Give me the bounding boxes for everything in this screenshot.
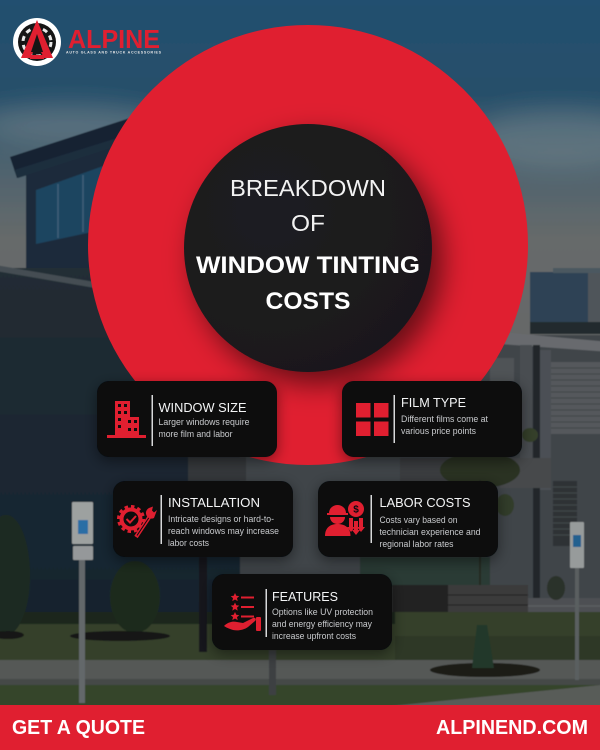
body — [380, 515, 480, 549]
body: Larger windows require — [158, 417, 250, 427]
card: film type — [342, 381, 522, 457]
upper block — [26, 140, 135, 275]
icon: worker with coin: $ — [353, 504, 359, 516]
title — [196, 175, 420, 315]
title: WINDOW TINTING — [196, 252, 420, 279]
body: various price points — [401, 426, 476, 436]
parking signs — [72, 502, 93, 544]
heading: FILM TYPE — [401, 395, 466, 410]
right building — [240, 335, 600, 645]
body: increase upfront costs — [272, 631, 356, 641]
body: labor costs — [168, 538, 209, 548]
call to action: GET A QUOTE — [12, 717, 145, 739]
shrubs — [110, 561, 160, 633]
footer bar — [0, 705, 600, 750]
body: Costs vary based on — [380, 515, 458, 525]
posts — [199, 557, 207, 652]
icon: worker with coin — [325, 501, 365, 536]
body: Intricate designs or hard-to- — [168, 514, 274, 524]
card: features — [212, 574, 392, 650]
logo wordmark: ALPINE — [68, 24, 160, 54]
logo — [13, 18, 162, 66]
body — [158, 417, 250, 439]
title disc — [184, 124, 432, 372]
low wall — [0, 268, 240, 613]
body: and energy efficiency may — [272, 619, 372, 629]
body: Different films come at — [401, 414, 488, 424]
body: technician experience and — [380, 527, 480, 537]
title: BREAKDOWN — [230, 175, 386, 201]
heading: WINDOW SIZE — [158, 400, 247, 415]
body: Options like UV protection — [272, 607, 373, 617]
title: COSTS — [266, 288, 350, 315]
body — [168, 514, 279, 548]
body: more film and labor — [158, 429, 232, 439]
glass entry — [360, 557, 490, 587]
card: labor costs — [318, 481, 498, 557]
logo badge — [13, 18, 61, 66]
red circle — [88, 25, 528, 465]
body: regional labor rates — [380, 539, 454, 549]
body — [272, 607, 373, 641]
tree — [440, 452, 520, 488]
body: reach windows may increase — [168, 526, 279, 536]
heading: FEATURES — [272, 589, 338, 604]
icon: rated list on hand — [224, 593, 261, 631]
card: window size — [97, 381, 277, 457]
icon: gear and wrench — [118, 506, 157, 537]
logo tagline: AUTO GLASS AND TRUCK ACCESSORIES — [66, 50, 162, 54]
stone wall — [392, 585, 528, 635]
icon: window panes — [356, 403, 388, 436]
mechanical unit — [530, 272, 588, 324]
stairs — [528, 598, 600, 648]
heading: LABOR COSTS — [380, 495, 471, 510]
ground — [0, 612, 600, 660]
icon: buildings — [107, 401, 146, 438]
heading: INSTALLATION — [168, 495, 260, 510]
body — [401, 414, 488, 436]
card: installation — [113, 481, 293, 557]
title: OF — [291, 210, 325, 236]
louvers — [490, 358, 600, 546]
website: ALPINEND.COM — [436, 717, 588, 739]
